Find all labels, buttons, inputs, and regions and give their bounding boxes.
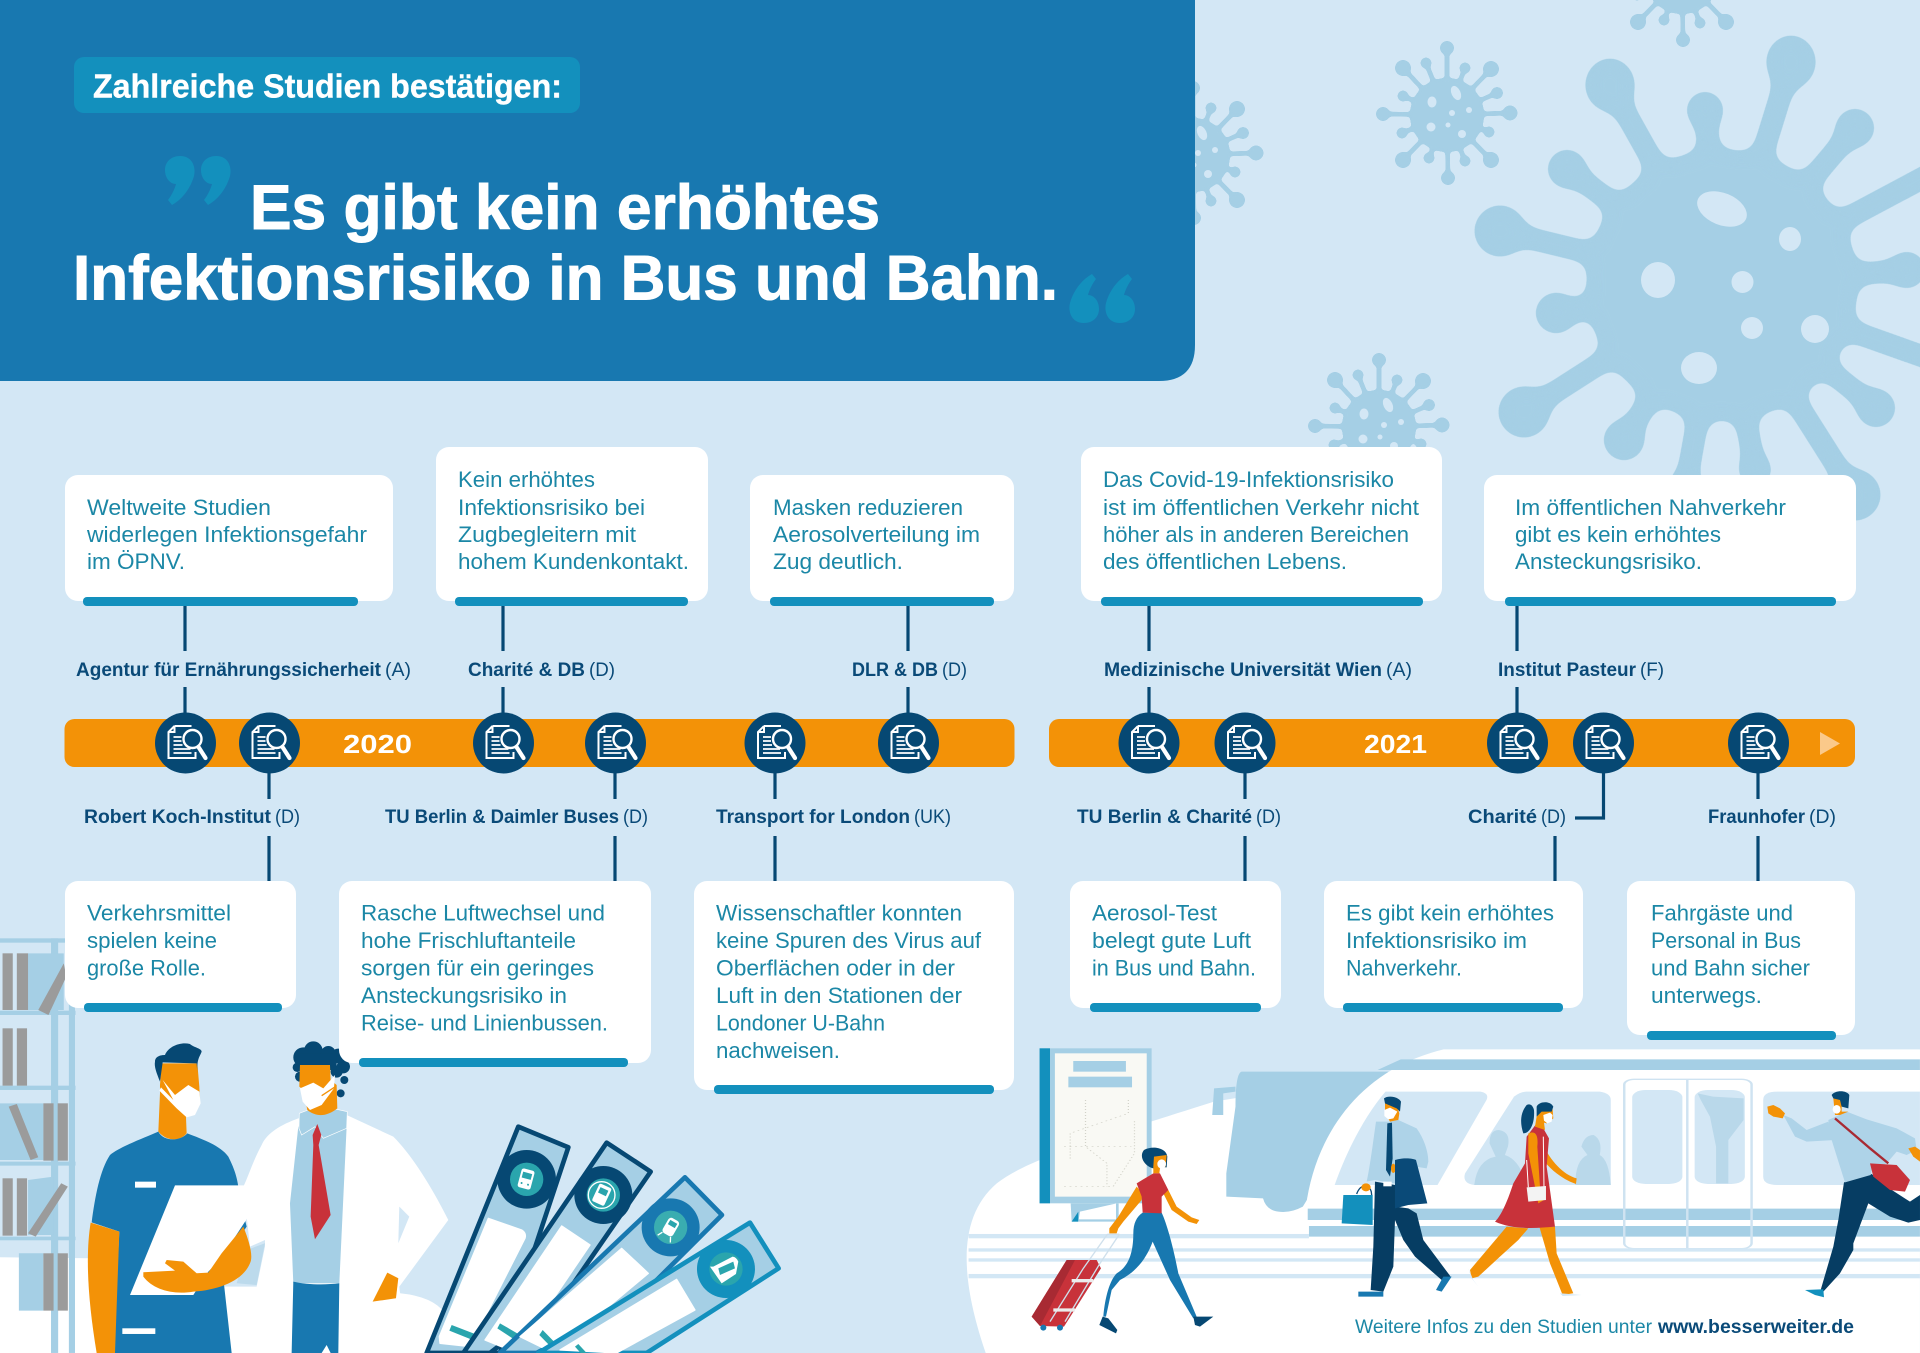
bus silhouette [1212, 1072, 1389, 1212]
lower organisation labels: (D) [1541, 807, 1566, 828]
upper organisation labels: (A) [1386, 660, 1412, 681]
upper organisation labels: Institut Pasteur [1498, 660, 1637, 681]
card text: im ÖPNV. [87, 549, 185, 574]
arrow [1820, 732, 1840, 755]
card: Wissenschaftler [694, 881, 1014, 1094]
accent bar [455, 597, 688, 606]
white platform [967, 1050, 1920, 1353]
lower organisation labels: TU Berlin & Charité [1077, 807, 1252, 828]
card text: Rasche Luftwechsel und [361, 900, 605, 926]
card text [1103, 467, 1419, 574]
card text: hohe Frischluftanteile [361, 928, 576, 953]
card text: Verkehrsmittel [87, 900, 231, 926]
doctor in scrubs [88, 1043, 251, 1353]
card: Weltweite Studien [65, 475, 393, 606]
card: Rasche Luftwechsel [339, 881, 651, 1067]
card: Es gibt kein erhöhtes [1324, 881, 1583, 1012]
upper organisation labels [76, 660, 1664, 681]
card text [458, 467, 689, 574]
footer note: www.besserweiter.de [1657, 1317, 1854, 1338]
card text [1651, 900, 1810, 1008]
card text: Wissenschaftler konnten [716, 900, 962, 926]
accent bar [84, 1003, 282, 1012]
upper organisation labels: (D) [942, 660, 967, 681]
card text: Weltweite Studien [87, 495, 271, 520]
metro map poster [1040, 1048, 1152, 1203]
running man [1767, 1091, 1920, 1297]
card: Aerosol-Test [1070, 881, 1281, 1012]
lower organisation labels: (D) [1809, 807, 1836, 828]
lower organisation labels: TU Berlin & Daimler Buses [385, 807, 619, 828]
card text: nachweisen. [716, 1038, 840, 1063]
card text [1346, 900, 1554, 980]
card text [1092, 900, 1256, 980]
title: Infektionsrisiko in Bus und Bahn. [73, 244, 1058, 314]
card: Masken reduzieren [750, 475, 1014, 606]
card text: Fahrgäste und [1651, 900, 1793, 926]
binder: tram [500, 1177, 722, 1353]
closing quote mark [1069, 274, 1135, 323]
card: Covid-19-Infektionsrisiko [1081, 447, 1442, 606]
lower organisation labels: (D) [1256, 807, 1281, 828]
card text [773, 495, 980, 574]
card text: höher als in anderen Bereichen [1103, 522, 1409, 547]
card text: Oberflächen oder in der [716, 956, 955, 980]
card text: spielen keine [87, 928, 217, 953]
timeline bar 2021 [1049, 719, 1855, 767]
card text: gibt es kein erhöhtes [1515, 522, 1721, 547]
card text: Aerosol-Test [1092, 900, 1217, 926]
card text: große Rolle. [87, 956, 206, 980]
card text [87, 900, 231, 980]
footer note [1355, 1317, 1854, 1338]
accent bar [770, 597, 994, 606]
card text: Zugbegleitern mit [458, 522, 636, 547]
title: Es gibt kein erhöhtes [250, 173, 880, 243]
card text [86, 495, 367, 574]
card text: sorgen für ein geringes [361, 956, 594, 980]
accent bar [1647, 1031, 1836, 1040]
train [1306, 1049, 1920, 1250]
card: Fahrgäste und Personal [1627, 881, 1855, 1040]
card text: und Bahn sicher [1651, 956, 1810, 980]
card text: Aerosolverteilung im [773, 522, 980, 547]
shelf with folders [0, 938, 89, 1353]
small viruses [1122, 0, 1752, 497]
opening quote mark [165, 156, 231, 205]
doctor in white coat [223, 1041, 448, 1353]
card text: ist im öffentlichen Verkehr nicht [1103, 495, 1419, 520]
man with briefcase [1342, 1097, 1452, 1297]
subtitle pill [74, 57, 580, 113]
poster stand [1071, 1203, 1119, 1222]
card text: unterwegs. [1651, 983, 1762, 1008]
illustration: two doctors [80, 1041, 453, 1353]
card text: Londoner U-Bahn [716, 1010, 885, 1036]
card text: widerlegen Infektionsgefahr [86, 522, 367, 547]
accent bar [1101, 597, 1423, 606]
timeline bar 2020 [64, 719, 1014, 767]
lower organisation labels: Transport for London [716, 807, 910, 828]
lower organisation labels: Charité [1468, 807, 1537, 828]
card text: in Bus und Bahn. [1092, 956, 1256, 980]
accent bar [1505, 597, 1836, 606]
card text: belegt gute Luft [1092, 928, 1251, 953]
binder: bus [427, 1127, 568, 1353]
title [73, 173, 1058, 314]
card text: Ansteckungsrisiko. [1515, 549, 1702, 574]
big virus [1473, 34, 1920, 522]
card text [716, 900, 982, 1063]
woman in red dress [1468, 1102, 1582, 1296]
card text: Reise- und Linienbussen. [361, 1010, 608, 1036]
accent bar [714, 1085, 994, 1094]
accent bar [83, 597, 358, 606]
card text: keine Spuren des Virus auf [716, 928, 982, 953]
upper organisation labels: (D) [589, 660, 615, 681]
card text: hohem Kundenkontakt. [458, 549, 689, 574]
timeline connector lines [185, 606, 1758, 881]
upper organisation labels: Medizinische Universität Wien [1104, 660, 1382, 681]
card text: des öffentlichen Lebens. [1103, 549, 1347, 574]
card text: Nahverkehr. [1346, 956, 1462, 980]
subtitle pill: Zahlreiche Studien bestätigen: [93, 68, 562, 104]
upper organisation labels: DLR & DB [852, 660, 938, 681]
white floor [80, 1260, 453, 1353]
binder: metro [463, 1143, 651, 1353]
card: Im öffentlichen Nahverkehr [1484, 475, 1856, 606]
lower organisation labels: (D) [623, 807, 648, 828]
card text: Das Covid-19-Infektionsrisiko [1103, 467, 1394, 492]
year 2020: 2020 [343, 729, 412, 759]
lower organisation labels: (D) [275, 807, 300, 828]
card text: Es gibt kein erhöhtes [1346, 900, 1554, 926]
lower organisation labels [84, 807, 1836, 828]
year 2021: 2021 [1364, 729, 1427, 759]
upper organisation labels: Agentur für Ernährungssicherheit [76, 660, 382, 681]
illustration: four binders [427, 1127, 779, 1353]
card text [361, 900, 608, 1036]
card text: Infektionsrisiko bei [458, 495, 645, 520]
accent bar [1343, 1003, 1563, 1012]
card: Verkehrsmittel [65, 881, 296, 1012]
card text: Im öffentlichen Nahverkehr [1515, 495, 1786, 520]
accent bar [1090, 1003, 1261, 1012]
platform stripes [969, 1234, 1920, 1278]
upper organisation labels: (A) [385, 660, 411, 681]
card text: Ansteckungsrisiko in [361, 983, 567, 1008]
card text: Masken reduzieren [773, 495, 963, 520]
card text [1515, 495, 1786, 574]
upper organisation labels: Charité & DB [468, 660, 585, 681]
header panel [0, 0, 1195, 381]
card text: Zug deutlich. [773, 549, 903, 574]
lower organisation labels: Fraunhofer [1708, 807, 1806, 828]
footer note: Weitere Infos zu den Studien unter [1355, 1317, 1653, 1338]
lower organisation labels: Robert Koch-Institut [84, 807, 272, 828]
card text: Infektionsrisiko im [1346, 928, 1527, 953]
card text: Luft in den Stationen der [716, 983, 962, 1008]
card: Kein erhöhtes Infektionsrisiko bei Zugbegleitern [436, 447, 708, 606]
upper organisation labels: (F) [1640, 660, 1664, 681]
study markers [155, 712, 1789, 774]
lower organisation labels: (UK) [914, 807, 951, 828]
card text: Personal in Bus [1651, 928, 1801, 953]
woman with suitcase [1032, 1148, 1213, 1333]
accent bar [359, 1058, 628, 1067]
card text: Kein erhöhtes [458, 467, 595, 492]
binder: train [538, 1223, 779, 1353]
illustration: station platform with train [967, 1048, 1920, 1353]
